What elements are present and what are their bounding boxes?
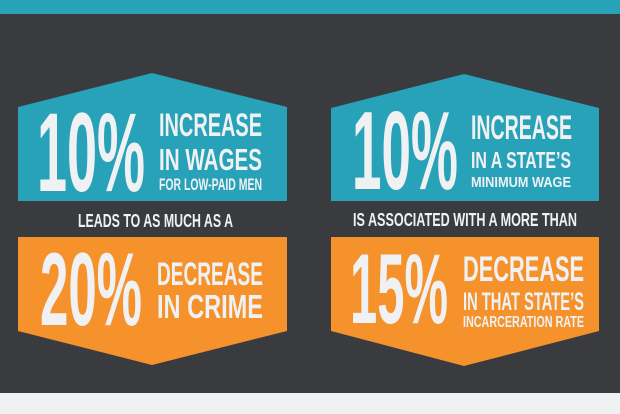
panel: right incarceration decrease	[331, 233, 599, 366]
panel: left crime decrease: IN CRIME	[157, 288, 263, 325]
panel: left crime decrease: 20%	[40, 232, 142, 348]
bottom light strip	[0, 393, 620, 414]
connector text left: LEADS TO AS MUCH AS A	[78, 211, 233, 231]
panel: right minimum wage increase: IN A STATE’S	[471, 147, 571, 173]
panel: left wages increase: INCREASE	[159, 107, 262, 143]
top teal band	[0, 0, 620, 14]
panel: right minimum wage increase: 10%	[352, 89, 458, 213]
panel: left wages increase: FOR LOW-PAID MEN	[159, 176, 262, 194]
panel: left crime decrease: DECREASE	[157, 256, 263, 292]
panel: right minimum wage increase: MINIMUM WAGE	[471, 174, 571, 191]
panel: left wages increase: 10%	[37, 90, 145, 215]
panel: right incarceration decrease: 15%	[350, 233, 448, 344]
panel: left wages increase: IN WAGES	[159, 142, 262, 177]
panel: left crime decrease	[18, 232, 287, 365]
